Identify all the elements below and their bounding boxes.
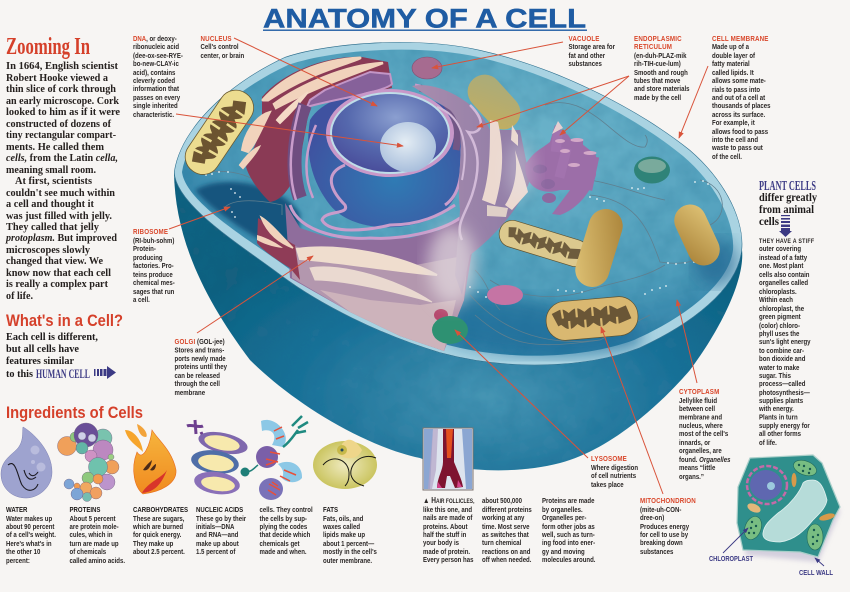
- text block: plant cell description: instead of a fatty: [759, 255, 807, 262]
- text block: history of the cell: couldn't see much within: [6, 187, 115, 199]
- label: dna: (dee-ox-see-RYE-: [133, 53, 183, 60]
- organelle: yellow capsule top: [461, 68, 527, 136]
- text block: plant cell description: Plants in turn: [759, 414, 798, 422]
- label: cell membrane: allows some mate-: [712, 78, 766, 85]
- text block: organelles: form other jobs as: [542, 524, 595, 531]
- caption: fats: mostly in the cell's: [323, 549, 377, 556]
- caption: carbohydrates: [132, 507, 188, 556]
- label: cytoplasm: organelles, are: [679, 448, 722, 455]
- label: cell membrane: waste to pass out: [711, 145, 763, 152]
- label: cytoplasm: most of the cell's: [679, 431, 728, 438]
- label: cytoplasm: Jellylike fluid: [679, 398, 717, 405]
- dna strand: [187, 420, 250, 497]
- label: cell membrane: across its surface.: [712, 112, 765, 119]
- caption: fats: [322, 507, 377, 565]
- ribosome dots: [205, 171, 709, 298]
- text block: history of the cell: thin slice of cork through: [6, 83, 116, 95]
- caption: nucleic acids: [196, 507, 246, 556]
- label: endoplasmic reticulum: rih-TIH-cue-lum): [634, 61, 681, 68]
- caption: nucleic acids: and RNA—and: [196, 532, 238, 539]
- shading in lower face: [450, 295, 640, 355]
- label: cell wall: CELL WALL: [799, 568, 833, 577]
- label: mitochondrion: dree-on): [640, 515, 664, 522]
- rna strand: [240, 416, 308, 500]
- text block: plant cell description: (color) chloro-: [759, 323, 800, 330]
- label: mitochondrion: MITOCHONDRION: [640, 498, 696, 505]
- caption: proteins: turn are made up: [70, 541, 119, 548]
- caption: proteins: of chemicals: [70, 549, 106, 556]
- shading behind right capsule: [693, 238, 737, 286]
- caption: fats: FATS: [323, 507, 338, 514]
- arrow: vacuole: [432, 42, 563, 68]
- cell shadow: [745, 458, 840, 562]
- text block: plant cell description: one. Most plant: [759, 263, 804, 270]
- label: cytoplasm: means “little: [679, 465, 716, 472]
- intro text: features similar: [6, 355, 74, 367]
- ingredients captions: [6, 507, 377, 565]
- text block: plant cell description: bon dioxide and: [759, 356, 805, 363]
- caption: nucleic acids continued: [260, 507, 313, 556]
- arrow: dna: [176, 114, 403, 146]
- label: endoplasmic reticulum: Smooth and rough: [634, 70, 688, 77]
- subheading: [759, 192, 817, 228]
- cell wall and cytoplasm: [737, 455, 840, 557]
- label: cytoplasm: organs.”: [679, 474, 704, 481]
- chloroplasts: [741, 457, 823, 550]
- text block: plant cell description: process—called: [759, 381, 805, 388]
- label: mitochondrion: breaking down: [640, 540, 683, 547]
- label: chloroplast: CHLOROPLAST: [709, 554, 753, 563]
- plant nucleus: [747, 466, 787, 504]
- text block: history of the cell: looked to him as if it were: [6, 106, 120, 118]
- text block: organelles: by organelles.: [542, 507, 583, 514]
- text block: plant cell description: to combine car-: [759, 348, 804, 355]
- label: mitochondrion: (mite-uh-CON-: [640, 507, 681, 514]
- caption: fats: lipids make up: [323, 532, 365, 539]
- text block: plant cell description: [758, 239, 814, 447]
- label: endoplasmic reticulum: [634, 36, 690, 102]
- text block: plant cell description: water to make: [758, 365, 800, 372]
- label: golgi: ports newly made: [174, 356, 226, 363]
- caption: water: [6, 507, 56, 565]
- icon: nucleic acids: [187, 416, 308, 500]
- text block: history of the cell: is really a complex part: [6, 278, 108, 290]
- text block: plant cell description: THEY HAVE A STIFF: [759, 239, 814, 245]
- text block: history of the cell: an early microscope. Cork: [6, 95, 119, 107]
- caption: water: of a cell's weight.: [6, 532, 56, 539]
- label: cytoplasm: membrane and: [679, 414, 722, 422]
- text block: plant cell description: photosynthesis—: [759, 390, 810, 397]
- text block: plant cell description: chloroplasts.: [759, 289, 797, 296]
- text block: proteins at work: reactions on and: [482, 549, 530, 556]
- text block: proteins at work: working at any: [481, 515, 525, 522]
- label: vacuole: VACUOLE: [568, 36, 600, 43]
- text block: proteins at work: different proteins: [482, 507, 532, 514]
- label: cell membrane: fatty material: [712, 61, 750, 68]
- text block: hair follicles: like this one, and: [423, 507, 472, 514]
- caption: water: percent:: [6, 558, 30, 565]
- heading: ingredients of cells: Ingredients of Cells: [6, 404, 143, 422]
- label: golgi: [174, 339, 227, 397]
- caption: carbohydrates: CARBOHYDRATES: [133, 507, 188, 514]
- text block: plant cell description: chloroplast, the: [759, 306, 804, 313]
- text block: organelles: molecules around.: [542, 557, 596, 564]
- subheading: cells: [759, 216, 779, 228]
- caption: nucleic acids continued: chemicals get: [260, 541, 300, 548]
- cell top face: [174, 42, 742, 365]
- label: endoplasmic reticulum: made by the cell: [634, 95, 681, 102]
- label: ribosome: factories. Pro-: [133, 263, 174, 270]
- text block: hair follicles: [423, 495, 475, 564]
- photo: hair follicle: [423, 428, 473, 490]
- structure: nucleus: [326, 89, 454, 177]
- caption: nucleic acids: initials—DNA: [196, 524, 234, 531]
- label: nucleus: center, or brain: [200, 53, 244, 60]
- label: lysosome: Where digestion: [591, 465, 638, 472]
- arrow: cytoplasm: [677, 300, 697, 383]
- label: dna: [133, 36, 183, 119]
- label: dna: cleverly coded: [133, 78, 175, 85]
- arrow: endoplasmic reticulum rough: [560, 76, 629, 135]
- text block: plant cell description: supplies plants: [759, 398, 803, 405]
- text block: plant cell description: phyll uses the: [759, 331, 800, 338]
- organelle: pink vesicle: [487, 285, 523, 305]
- text block: hair follicles: ▲ HAIR FOLLICLES,: [423, 495, 475, 505]
- intro text: but all cells have: [6, 343, 79, 355]
- caption: nucleic acids continued: the cells by sup-: [260, 516, 307, 523]
- caption: fats: outer membrane.: [323, 558, 372, 565]
- text block: proteins at work: off when needed.: [482, 557, 532, 564]
- label: cytoplasm: innards, or: [679, 440, 711, 447]
- structure: blue sphere behind nucleus: [308, 91, 465, 227]
- structure: lower golgi and mauve mass: [257, 203, 474, 351]
- caption: fats: Fats, oils, and: [323, 516, 363, 523]
- caption: nucleic acids continued: cells. They control: [260, 507, 313, 514]
- organelle: teal cup: [634, 156, 670, 184]
- panel: what's in a cell: [6, 312, 123, 381]
- caption: water: WATER: [6, 507, 28, 514]
- label: dna: bo-new-CLAY-ic: [133, 61, 179, 68]
- panel: plant cells: [758, 179, 817, 447]
- intro text: HUMAN CELL: [36, 366, 90, 381]
- label: ribosome: (RI-buh-sohm): [133, 238, 174, 245]
- icon: carbohydrate flame: [125, 424, 176, 494]
- text block: history of the cell: Robert Hooke viewed a: [6, 72, 109, 84]
- label: cell membrane: of the cell.: [712, 154, 742, 161]
- label: lysosome: [591, 456, 638, 489]
- organelle: right capsule: [669, 199, 725, 271]
- label: dna: single inherited: [133, 103, 178, 110]
- text block: hair follicles: half the stuff in: [423, 532, 466, 539]
- caption: carbohydrates: for quick energy.: [133, 532, 181, 539]
- text block: history of the cell: constructed of dozens of: [6, 118, 111, 130]
- label: golgi: Stores and trans-: [174, 347, 224, 355]
- label: endoplasmic reticulum: and store materials: [634, 86, 690, 93]
- structure: purple golgi tubes: [525, 121, 599, 215]
- caption: proteins: cules, which in: [70, 532, 113, 539]
- caption: carbohydrates: These are sugars,: [133, 516, 185, 523]
- label: cell wall: [799, 558, 833, 577]
- intro text: Each cell is different,: [6, 331, 98, 343]
- text block: plant cell description: sugar. This: [759, 373, 791, 380]
- label: endoplasmic reticulum: tubes that move: [634, 78, 681, 85]
- text block: plant cell description: of life.: [759, 440, 777, 447]
- text block: proteins at work: about 500,000: [482, 498, 522, 505]
- panel: zooming in: [5, 34, 120, 302]
- subheading: from animal: [759, 204, 814, 216]
- label: golgi: can be released: [174, 373, 220, 380]
- cell base bowl: [174, 172, 742, 470]
- label: nucleus: [200, 36, 244, 60]
- central vacuole: [763, 480, 827, 542]
- intro text: [6, 331, 98, 381]
- label: endoplasmic reticulum: RETICULUM: [634, 44, 672, 51]
- label: dna: characteristic.: [133, 112, 174, 119]
- label: cytoplasm: [679, 389, 731, 481]
- text block: plant cell description: sun's light energy: [759, 339, 811, 346]
- text block: plant cell description: cells also contain: [759, 272, 809, 279]
- text block: history of the cell: protoplasm. But improved: [5, 232, 117, 244]
- label: cell membrane: into the cell and: [712, 137, 758, 144]
- label: mitochondrion: substances: [640, 549, 674, 556]
- structure: smooth endoplasmic reticulum folds: [291, 72, 463, 230]
- label: ribosome: [133, 229, 175, 304]
- label: ribosome: teins produce: [133, 272, 173, 279]
- text block: history of the cell: changed that view. We: [6, 255, 103, 267]
- label: ribosome: producing: [133, 255, 163, 262]
- text block: organelles: [541, 498, 596, 564]
- arrow: lysosome: [455, 330, 588, 458]
- organelle: middle mitochondrion: [496, 217, 592, 270]
- text block: hair follicles: Every person has: [423, 557, 474, 564]
- caption: carbohydrates: They make up: [133, 541, 173, 548]
- icon: fat globule: [313, 440, 377, 489]
- arrow: ribosome: [169, 207, 230, 229]
- caption: nucleic acids continued: made and when.: [260, 549, 307, 556]
- label: nucleus: NUCLEUS: [200, 36, 232, 43]
- text block: history of the cell: [5, 60, 120, 302]
- caption: nucleic acids continued: plying the codes: [260, 524, 307, 531]
- label: lysosome: LYSOSOME: [591, 456, 627, 463]
- text block: plant cell description: Within each: [759, 297, 793, 304]
- text block: plant cell description: all other forms: [759, 431, 801, 438]
- chart: cell illustration: [174, 42, 742, 470]
- label: golgi: through the cell: [174, 381, 220, 388]
- caption: water: Water makes up: [6, 516, 52, 523]
- organelle: middle capsule: [571, 205, 627, 291]
- caption: carbohydrates: about 2.5 percent.: [133, 549, 185, 556]
- nucleolus: [380, 122, 436, 172]
- label: cytoplasm: found. Organelles: [679, 457, 731, 464]
- text block: hair follicles: your body is: [423, 540, 459, 547]
- subheading: differ greatly: [759, 192, 817, 204]
- text block: plant cell description: supply energy for: [759, 423, 810, 430]
- intro text: to this: [6, 368, 34, 380]
- label: vacuole: Storage area for: [568, 44, 615, 51]
- text block: proteins at work: turn chemical: [482, 540, 521, 547]
- text block: organelles: gy and moving: [542, 549, 585, 556]
- organelle: bottom mitochondrion: [545, 295, 640, 342]
- label: nucleus: Cell's control: [200, 44, 239, 51]
- label: cell membrane: called lipids. It: [712, 70, 754, 77]
- title: ANATOMY OF A CELL: [263, 4, 586, 34]
- text block: organelles: Proteins are made: [542, 498, 595, 505]
- text block: organelles: Organelles per-: [542, 515, 586, 522]
- heading: what's in a cell: What's in a Cell?: [6, 312, 123, 330]
- arrow: endoplasmic reticulum smooth: [477, 76, 629, 127]
- label: cytoplasm: nucleus, where: [679, 423, 723, 430]
- caption: nucleic acids: NUCLEIC ACIDS: [196, 507, 244, 514]
- text block: history of the cell: tiny rectangular compart-: [6, 129, 116, 141]
- caption: water: the other 10: [6, 549, 41, 556]
- organelle: vacuole: [412, 57, 442, 79]
- plant mitochondria: [746, 473, 836, 522]
- text block: proteins at work: time. Most serve: [482, 524, 530, 531]
- illustration: plant cell: [737, 455, 840, 562]
- text block: history of the cell: cells, from the Latin cella,: [6, 152, 118, 164]
- label: ribosome: a cell.: [133, 297, 150, 304]
- label: cell membrane: Made up of a: [712, 44, 749, 51]
- label: chloroplast: [709, 528, 753, 563]
- label: golgi: membrane: [174, 390, 205, 397]
- heading: zooming in: Zooming In: [6, 34, 90, 60]
- label: vacuole: fat and other: [568, 53, 605, 60]
- text block: organelles: ing food into ener-: [542, 540, 595, 547]
- caption: fats: waxes called: [322, 524, 360, 531]
- text block: history of the cell: know now that each cell: [6, 267, 111, 279]
- text block: history of the cell: They called that jelly: [6, 221, 100, 233]
- icon: water drop: [1, 427, 52, 498]
- label: cell membrane: thousands of places: [712, 103, 771, 110]
- label: dna: passes on every: [133, 95, 180, 102]
- caption: fats: about 1 percent—: [323, 541, 374, 548]
- caption: proteins: PROTEINS: [70, 507, 101, 514]
- caption: nucleic acids: These go by their: [196, 516, 246, 523]
- arrow: cell membrane: [679, 66, 708, 138]
- arrow: mitochondrion: [601, 327, 663, 494]
- text block: plant cell description: organelles called: [759, 280, 808, 287]
- label: cell membrane: and out of a cell at: [712, 95, 766, 102]
- caption: nucleic acids continued: that decide which: [260, 532, 310, 539]
- caption: proteins: About 5 percent: [70, 516, 116, 523]
- label: endoplasmic reticulum: (en-duh-PLAZ-mik: [634, 53, 687, 60]
- label: cell membrane: double layer of: [712, 53, 756, 60]
- label: cell membrane: [711, 36, 771, 161]
- label: cell membrane: CELL MEMBRANE: [712, 36, 769, 43]
- label: vacuole: substances: [568, 61, 602, 68]
- label: dna: information that: [133, 86, 180, 93]
- caption: carbohydrates: which are burned: [132, 524, 183, 531]
- label: mitochondrion: Produces energy: [640, 524, 689, 531]
- label: golgi: proteins until they: [174, 364, 227, 371]
- chloroplast grana: [748, 464, 819, 545]
- caption: proteins: [70, 507, 125, 565]
- text block: hair follicles: made of protein.: [423, 549, 470, 556]
- label: cell membrane: For example, it: [712, 120, 755, 127]
- label: ribosome: RIBOSOME: [133, 229, 168, 236]
- label: dna: acid), contains: [133, 70, 176, 77]
- arrow: golgi: [197, 256, 313, 333]
- organelle: left mitochondrion: [179, 84, 260, 181]
- dark shading in lower left: [194, 179, 302, 241]
- text block: history of the cell: meaning small room.: [6, 164, 96, 176]
- caption: water: about 90 percent: [6, 524, 55, 531]
- text block: organelles: well, such as turn-: [541, 532, 595, 539]
- label: dna: ribonucleic acid: [133, 44, 179, 51]
- text block: history of the cell: In 1664, English scientist: [6, 60, 118, 72]
- caption: proteins: are protein mole-: [70, 524, 119, 531]
- caption: proteins: called amino acids.: [70, 558, 125, 565]
- label: cell membrane: allows food to pass: [712, 129, 768, 136]
- label: lysosome: of cell nutrients: [591, 473, 636, 480]
- label: endoplasmic reticulum: ENDOPLASMIC: [634, 36, 682, 43]
- mist over the cell: [428, 140, 534, 305]
- icon: protein beads: [58, 423, 119, 502]
- text block: proteins at work: as switches that: [482, 532, 529, 539]
- text block: hair follicles: proteins. About: [423, 524, 468, 531]
- text block: proteins at work: [481, 498, 532, 564]
- golgi maroon stack: [257, 218, 300, 280]
- text block: plant cell description: outer covering: [759, 246, 801, 253]
- text block: plant cell description: with energy.: [758, 406, 794, 413]
- cream bands: [297, 247, 437, 275]
- caption: nucleic acids: 1.5 percent of: [196, 549, 236, 556]
- text block: history of the cell: microscopes slowly: [6, 244, 91, 256]
- text block: plant cell description: green pigment: [759, 314, 801, 321]
- label: dna: DNA, or deoxy-: [133, 36, 177, 43]
- text block: history of the cell: At first, scientists: [15, 175, 92, 187]
- arrow: down to plant cell text: [779, 215, 792, 237]
- text block: history of the cell: a cell and thought it: [6, 198, 94, 210]
- arrow: to human cell: [94, 366, 116, 379]
- label: cytoplasm: CYTOPLASM: [679, 389, 719, 396]
- fibres and ribosome dots: [205, 103, 722, 345]
- label: mitochondrion: for cell to use by: [640, 532, 688, 539]
- text block: hair follicles: nails are made of: [423, 515, 473, 522]
- label: golgi: GOLGI (GOL-jee): [174, 339, 225, 346]
- structure: rough endoplasmic reticulum: [240, 57, 392, 202]
- arrow: nucleus: [234, 38, 377, 106]
- caption: water: Here's what's in: [6, 541, 52, 548]
- text block: history of the cell: was just filled with jelly.: [6, 210, 112, 222]
- leader lines: [169, 38, 708, 494]
- label: vacuole: [568, 36, 615, 68]
- label: cytoplasm: between cell: [679, 406, 715, 413]
- caption: nucleic acids: make up about: [196, 541, 239, 548]
- label: cell membrane: rials to pass into: [712, 87, 760, 94]
- text block: history of the cell: of life.: [6, 290, 33, 302]
- structure: right endoplasmic reticulum: [412, 85, 530, 295]
- label: ribosome: Protein-: [133, 246, 156, 253]
- text block: history of the cell: ments. He called them: [6, 141, 104, 153]
- label: ribosome: sages that run: [133, 289, 174, 296]
- organelle: lysosome: [432, 309, 468, 344]
- label: lysosome: takes place: [591, 482, 624, 489]
- label: ribosome: chemical mes-: [133, 280, 175, 287]
- label: mitochondrion: [640, 498, 696, 556]
